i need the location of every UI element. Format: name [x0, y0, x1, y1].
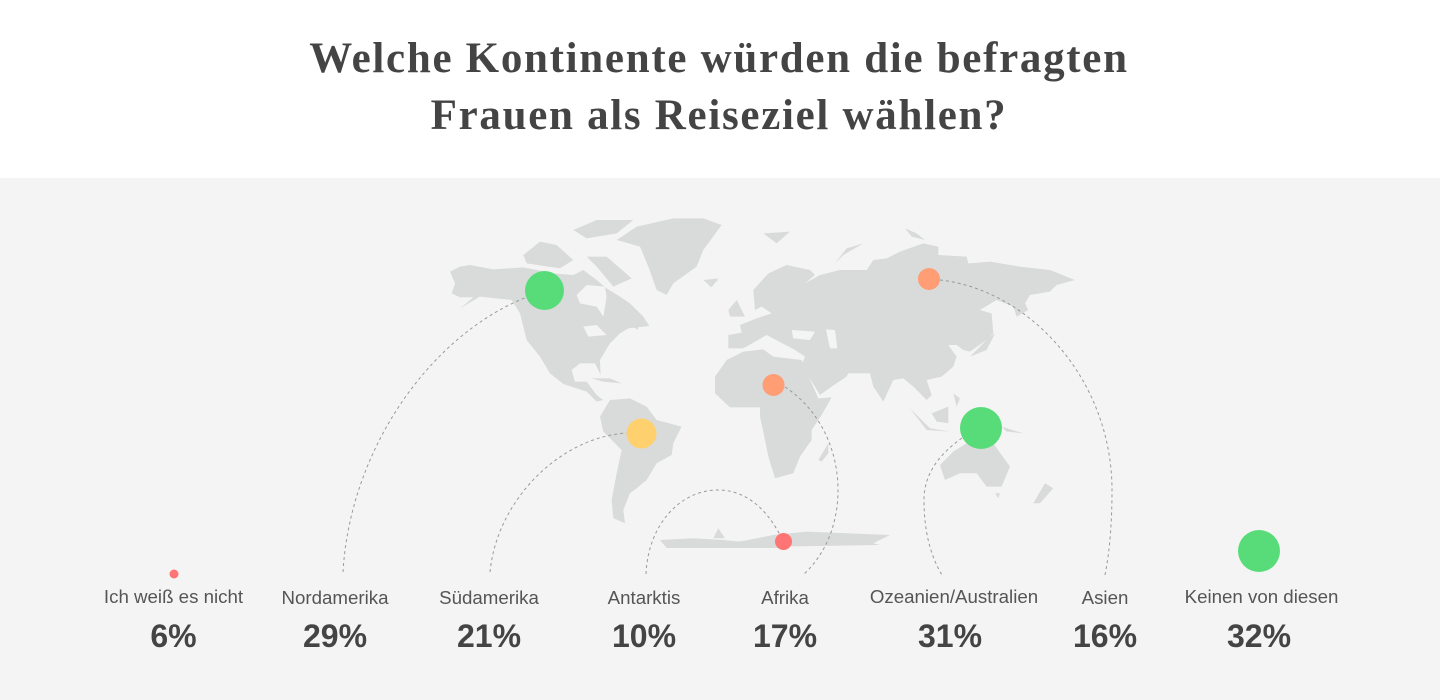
marker: Ozeanien: [960, 407, 1002, 449]
stat: Südamerika: [439, 587, 539, 654]
stat: Keinen von diesen: Keinen von diesen: [1185, 586, 1338, 607]
panel: map background: [0, 178, 1440, 700]
title: Welche Kontinente würden die befragten: [309, 35, 1129, 82]
arc: Antarktis: [646, 490, 781, 574]
stat: Asien: Asien: [1082, 587, 1128, 608]
stat: Ozeanien/Australien: 31%: [918, 618, 982, 654]
marker: Afrika: [762, 374, 784, 396]
stat: Südamerika: Südamerika: [439, 587, 539, 608]
title: [309, 35, 1129, 139]
arc: Asien: [940, 280, 1112, 575]
stat: Südamerika: 21%: [457, 618, 521, 654]
arc: Nordamerika: [343, 297, 527, 572]
stat: Nordamerika: [282, 587, 389, 654]
stat: Antarktis: Antarktis: [608, 587, 680, 608]
marker: Nordamerika: [525, 271, 564, 310]
title: Frauen als Reiseziel wählen?: [431, 92, 1007, 139]
stat: Ich weiß es nicht: Ich weiß es nicht: [104, 586, 243, 607]
map: eurasia africa australia: [700, 228, 1075, 548]
stat: Afrika: Afrika: [761, 587, 809, 608]
stat: Nordamerika: 29%: [303, 618, 367, 654]
stat: Ozeanien/Australien: Ozeanien/Australien: [870, 586, 1038, 607]
marker: Südamerika: [626, 418, 656, 448]
stat: Afrika: [753, 587, 817, 654]
arc: Ozeanien: [924, 438, 962, 575]
stat: Antarktis: [608, 587, 680, 654]
stat: Keinen von diesen: 32%: [1227, 618, 1291, 654]
stat: Keinen von diesen: [1185, 586, 1338, 654]
map: americas and greenland: [450, 218, 780, 548]
arc: Südamerika: [490, 433, 627, 572]
stat: Afrika: 17%: [753, 618, 817, 654]
stat: Ich weiß es nicht: 6%: [150, 618, 197, 654]
stat: Antarktis: 10%: [612, 618, 676, 654]
marker: Ich weiß es nicht: [170, 570, 178, 578]
stat: Ich weiß es nicht: [104, 586, 243, 654]
stat: Nordamerika: Nordamerika: [282, 587, 388, 608]
stat: Asien: 16%: [1073, 618, 1137, 654]
stat: Asien: [1073, 587, 1137, 654]
arc: Afrika: [785, 387, 838, 575]
stat: Ozeanien/Australien: [870, 586, 1038, 654]
marker: Keinen von diesen: [1238, 530, 1280, 572]
marker: Asien: [918, 268, 940, 290]
marker: Antarktis: [775, 533, 792, 550]
